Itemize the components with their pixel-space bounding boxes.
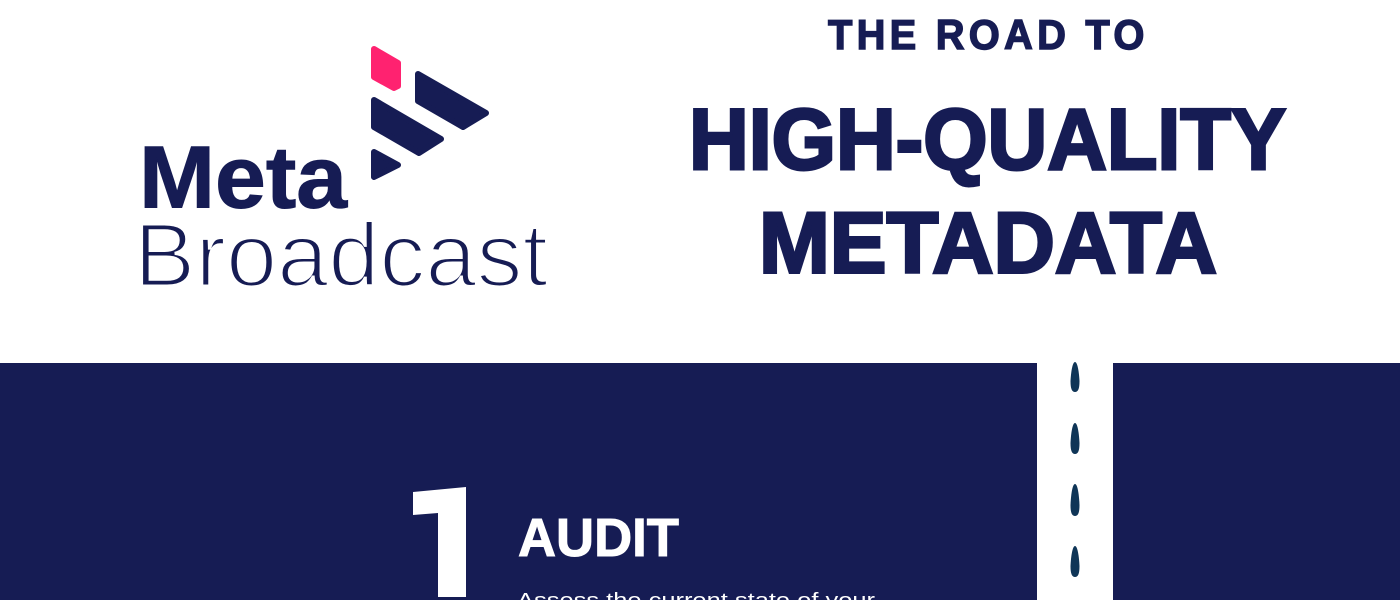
- icon: pink square of logo mark: [374, 49, 398, 88]
- logo word: Meta: Meta: [139, 128, 348, 226]
- road with dashed centre line: [1037, 362, 1113, 600]
- title: [689, 11, 1286, 291]
- logo: Meta Broadcast: [134, 49, 548, 306]
- title line: THE ROAD TO: THE ROAD TO: [828, 11, 1144, 58]
- step number 1: [413, 487, 466, 597]
- step 1: audit: [413, 487, 875, 600]
- step heading: AUDIT: AUDIT: [518, 508, 679, 568]
- icon: middle navy stripe of logo mark: [374, 100, 441, 153]
- title line: HIGH-QUALITY: HIGH-QUALITY: [689, 92, 1286, 188]
- icon: upper navy stripe of logo mark: [418, 74, 486, 127]
- title line: METADATA: METADATA: [759, 196, 1217, 292]
- panel: navy band: [0, 363, 1400, 600]
- icon: small navy triangle of logo mark: [374, 152, 398, 177]
- logo word: Broadcast: Broadcast: [134, 206, 548, 306]
